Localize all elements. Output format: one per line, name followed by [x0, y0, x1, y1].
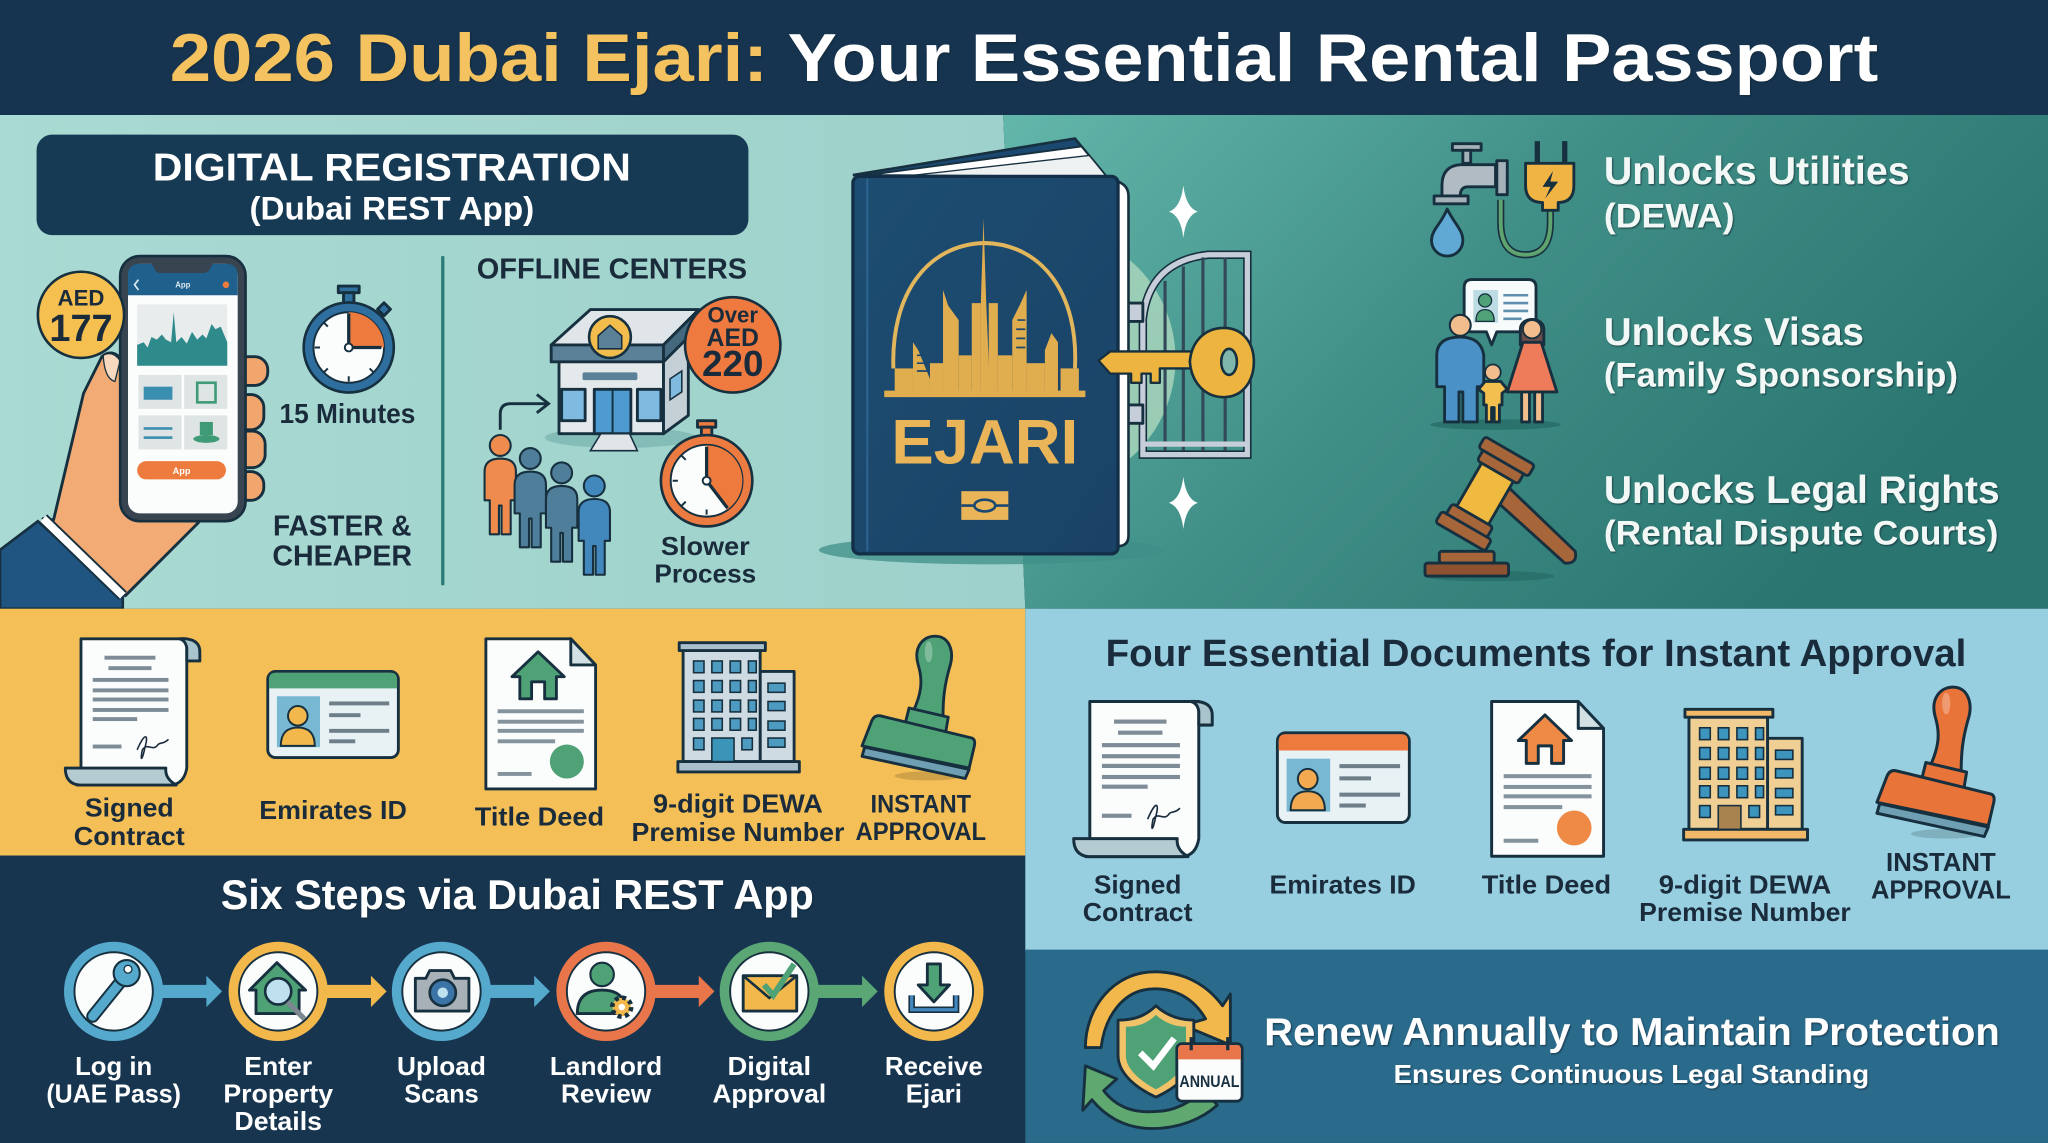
phone — [120, 256, 246, 521]
icon: queue of people — [485, 395, 610, 575]
label: DEWA premise number — [1639, 869, 1851, 927]
panel: yellow documents strip — [0, 609, 1025, 856]
heading: digital registration: DIGITAL REGISTRATION — [153, 146, 631, 189]
arrow: step 4 to 5 — [652, 976, 714, 1007]
text: unlocks utilities — [1604, 150, 1910, 235]
label: signed contract: Signed — [85, 792, 174, 822]
step 3: upload scans — [392, 942, 491, 1108]
icon: stopwatch 15 minutes — [304, 286, 394, 393]
text: unlocks visas: Unlocks Visas — [1604, 311, 1864, 354]
arrow: step 5 to 6 — [815, 976, 878, 1007]
step 2: enter property details — [223, 942, 334, 1136]
badge: over AED 220: 220 — [702, 343, 763, 384]
icon: tap and plug — [1432, 141, 1574, 256]
label: DEWA premise number — [632, 788, 844, 847]
panel: four essential documents — [1025, 609, 2048, 951]
icon: orange stamp — [1877, 687, 1994, 839]
step 4: landlord review: Review — [561, 1078, 652, 1108]
badge: AED 177: 177 — [49, 308, 113, 350]
icon: family with visa bubble — [1430, 280, 1561, 430]
label: emirates id: Emirates ID — [1270, 869, 1416, 899]
label: instant approval: INSTANT — [1886, 847, 1996, 877]
step 2: enter property details: Enter — [244, 1051, 312, 1081]
label: signed contract — [74, 792, 185, 851]
heading: six steps: Six Steps via Dubai REST App — [221, 871, 814, 918]
step 5: digital approval: Approval — [712, 1078, 826, 1108]
title — [170, 21, 1878, 96]
heading: offline centers: OFFLINE CENTERS — [477, 253, 747, 285]
step 2: enter property details: Details — [234, 1106, 322, 1136]
icon: slow stopwatch — [661, 421, 752, 526]
icon: annual renewal cycle — [1083, 972, 1242, 1129]
label: signed contract: Contract — [74, 821, 185, 851]
label: slower process: Process — [654, 559, 756, 589]
gate — [1127, 255, 1247, 455]
panel: header band — [0, 0, 2048, 115]
calendar — [1177, 1037, 1242, 1101]
badge: AED 177: AED — [58, 286, 104, 311]
icon: green stamp — [862, 636, 975, 780]
panel: six steps — [0, 856, 1025, 1143]
label: instant approval — [856, 791, 986, 846]
step 5: digital approval — [712, 942, 826, 1108]
step 6: receive ejari: Receive — [885, 1051, 983, 1081]
label: instant approval: APPROVAL — [856, 819, 986, 846]
label: instant approval — [1871, 847, 2011, 905]
icon: emirates id — [1277, 733, 1409, 823]
icon: DEWA building — [1684, 709, 1808, 840]
arrow: step 3 to 4 — [487, 976, 550, 1007]
step 6: receive ejari: Ejari — [906, 1078, 962, 1108]
text: unlocks utilities: Unlocks Utilities — [1604, 150, 1910, 193]
arrow: step 2 to 3 — [324, 976, 387, 1007]
text: unlocks visas — [1604, 311, 1958, 395]
text: unlocks legal rights: (Rental Dispute Courts) — [1604, 515, 1998, 553]
text: unlocks legal rights — [1604, 469, 2000, 553]
icon: DEWA building — [678, 643, 799, 772]
label: DEWA premise number: 9-digit DEWA — [1659, 869, 1831, 899]
icon: signed contract — [65, 639, 200, 785]
label: 15 minutes: 15 Minutes — [280, 398, 415, 429]
badge: AED 177 — [38, 272, 124, 358]
illustration: hand holding phone — [0, 256, 268, 609]
step 2: enter property details: Property — [223, 1078, 334, 1108]
text: renew annually: Renew Annually to Maintain Protection — [1264, 1011, 2000, 1054]
calendar: ANNUAL — [1179, 1072, 1240, 1091]
phone: App — [173, 466, 191, 476]
panel: passport unlocks background — [1003, 115, 2048, 609]
icon: gavel — [1424, 436, 1576, 581]
label: signed contract: Signed — [1094, 869, 1181, 899]
arrow: step 1 to 2 — [159, 976, 222, 1007]
sparkle — [1169, 186, 1198, 238]
label: title deed: Title Deed — [475, 802, 604, 832]
label: instant approval: APPROVAL — [1871, 875, 2011, 905]
badge: over AED 220: Over — [707, 303, 758, 328]
label: instant approval: INSTANT — [871, 791, 971, 818]
badge: over AED 220 — [685, 297, 780, 393]
step 1: log in: Log in — [75, 1051, 152, 1081]
chip — [961, 491, 1008, 520]
heading: digital registration: (Dubai REST App) — [249, 190, 534, 226]
title: Your Essential Rental Passport — [788, 21, 1878, 96]
phone: App — [175, 280, 191, 289]
icon: key — [1098, 328, 1254, 397]
label: DEWA premise number: Premise Number — [1639, 897, 1851, 927]
step 3: upload scans: Scans — [404, 1078, 479, 1108]
step 4: landlord review: Landlord — [550, 1051, 662, 1081]
step 1: log in: (UAE Pass) — [46, 1078, 181, 1108]
illustration: Ejari passport with key and gate — [819, 139, 1254, 564]
label: signed contract — [1083, 869, 1193, 927]
sparkle — [1169, 477, 1198, 529]
label: title deed: Title Deed — [1482, 869, 1611, 899]
label: signed contract: Contract — [1083, 897, 1193, 927]
icon: title deed — [486, 639, 596, 789]
heading: four essential documents: Four Essential Documents for Instant Approval — [1106, 633, 1966, 675]
panel: digital registration background — [0, 115, 1025, 609]
label: DEWA premise number: Premise Number — [632, 817, 844, 847]
panel: annual renewal — [1025, 950, 2048, 1143]
step 1: log in — [46, 942, 181, 1108]
badge: over AED 220: AED — [707, 325, 759, 352]
emblem: skyline arch — [884, 218, 1085, 397]
step 3: upload scans: Upload — [397, 1051, 486, 1081]
label: DEWA premise number: 9-digit DEWA — [653, 788, 823, 818]
title: 2026 Dubai Ejari: — [170, 21, 768, 96]
step 6: receive ejari — [884, 942, 984, 1108]
icon: service center building — [545, 310, 699, 451]
step 5: digital approval: Digital — [728, 1051, 811, 1081]
label: emirates id: Emirates ID — [259, 795, 407, 825]
text: renew annually: Ensures Continuous Legal Standing — [1394, 1059, 1869, 1089]
emblem text: EJARI: EJARI — [891, 408, 1078, 478]
text: unlocks utilities: (DEWA) — [1604, 197, 1735, 235]
icon: title deed — [1492, 701, 1604, 856]
label: slower process: Slower — [661, 531, 750, 561]
label: faster and cheaper: CHEAPER — [272, 541, 412, 573]
label: faster and cheaper — [272, 511, 412, 573]
text: renew annually — [1264, 1011, 2000, 1089]
heading: digital registration — [37, 135, 748, 235]
label: faster and cheaper: FASTER & — [273, 511, 411, 543]
step 4: landlord review — [550, 942, 662, 1108]
label: slower process — [654, 531, 756, 589]
icon: signed contract — [1074, 701, 1212, 857]
text: unlocks legal rights: Unlocks Legal Rights — [1604, 469, 2000, 512]
icon: emirates id — [268, 671, 398, 758]
text: unlocks visas: (Family Sponsorship) — [1604, 357, 1958, 395]
